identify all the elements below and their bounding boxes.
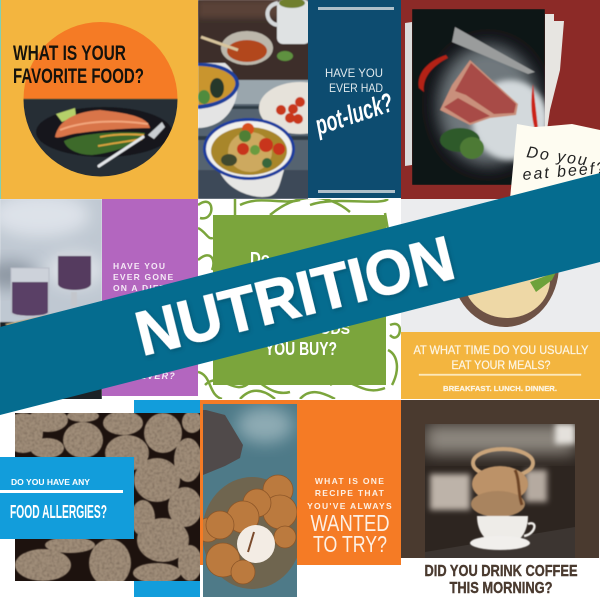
panel: meals	[401, 199, 600, 399]
panel: diet: ON A DIET?	[113, 283, 173, 293]
allergies label	[0, 457, 134, 539]
panel: diet: HAVE YOU	[113, 261, 166, 271]
panel: favorite food	[0, 0, 198, 199]
steak photo	[412, 9, 548, 185]
panel: steak	[401, 0, 600, 199]
heading: WHAT IS YOUR	[13, 42, 126, 65]
panel: diet: EVER GONE	[113, 272, 174, 282]
recipe text	[307, 476, 393, 557]
pot-luck text: EVER HAD	[329, 81, 383, 95]
green panel text: Do	[250, 249, 270, 269]
heading: FAVORITE FOOD?	[13, 65, 144, 88]
panel: green foods	[198, 198, 401, 399]
panel: pot-luck	[308, 0, 401, 198]
panel: meals: EAT YOUR MEALS?	[452, 358, 551, 372]
recipe text: WHAT IS ONE	[315, 476, 385, 486]
heading	[13, 42, 144, 88]
green panel text	[250, 249, 350, 359]
panel: allergies	[0, 400, 202, 597]
coffee heading: THIS MORNING?	[450, 580, 552, 597]
recipe text: YOU'VE ALWAYS	[307, 501, 393, 511]
panel: meals: AT WHAT TIME DO YOU USUALLY	[414, 343, 588, 357]
coffee photo	[425, 424, 575, 558]
pot-luck text: HAVE YOU	[325, 66, 383, 80]
recipe text: TO TRY?	[313, 531, 387, 557]
note card: Do you	[525, 144, 590, 170]
recipe text: WANTED	[310, 510, 390, 536]
cookies photo	[203, 404, 297, 597]
allergies label: FOOD ALLERGIES?	[10, 502, 107, 522]
pot-luck text	[311, 66, 397, 141]
panel: coffee	[401, 400, 599, 597]
walnuts photo	[15, 413, 200, 581]
panel: soup photo	[198, 0, 308, 199]
panel: recipe	[196, 400, 401, 597]
green panel text: YOU BUY?	[265, 339, 337, 359]
torn paper	[405, 22, 412, 166]
coffee heading	[424, 563, 578, 597]
panel: diet	[102, 199, 198, 396]
panel: meals: BREAKFAST. LUNCH. DINNER.	[443, 384, 557, 393]
orange semicircle	[24, 22, 178, 99]
note card	[510, 124, 600, 199]
green panel text: FOODS	[300, 321, 350, 338]
banner title: NUTRITION	[129, 224, 461, 369]
pot-luck text: pot-luck?	[311, 87, 397, 141]
allergies label: DO YOU HAVE ANY	[11, 477, 90, 487]
salmon plate photo	[20, 99, 180, 179]
recipe text: RECIPE THAT	[315, 488, 385, 498]
panel: diet: EVER?	[140, 371, 176, 381]
panel: smoothies photo	[0, 193, 105, 400]
